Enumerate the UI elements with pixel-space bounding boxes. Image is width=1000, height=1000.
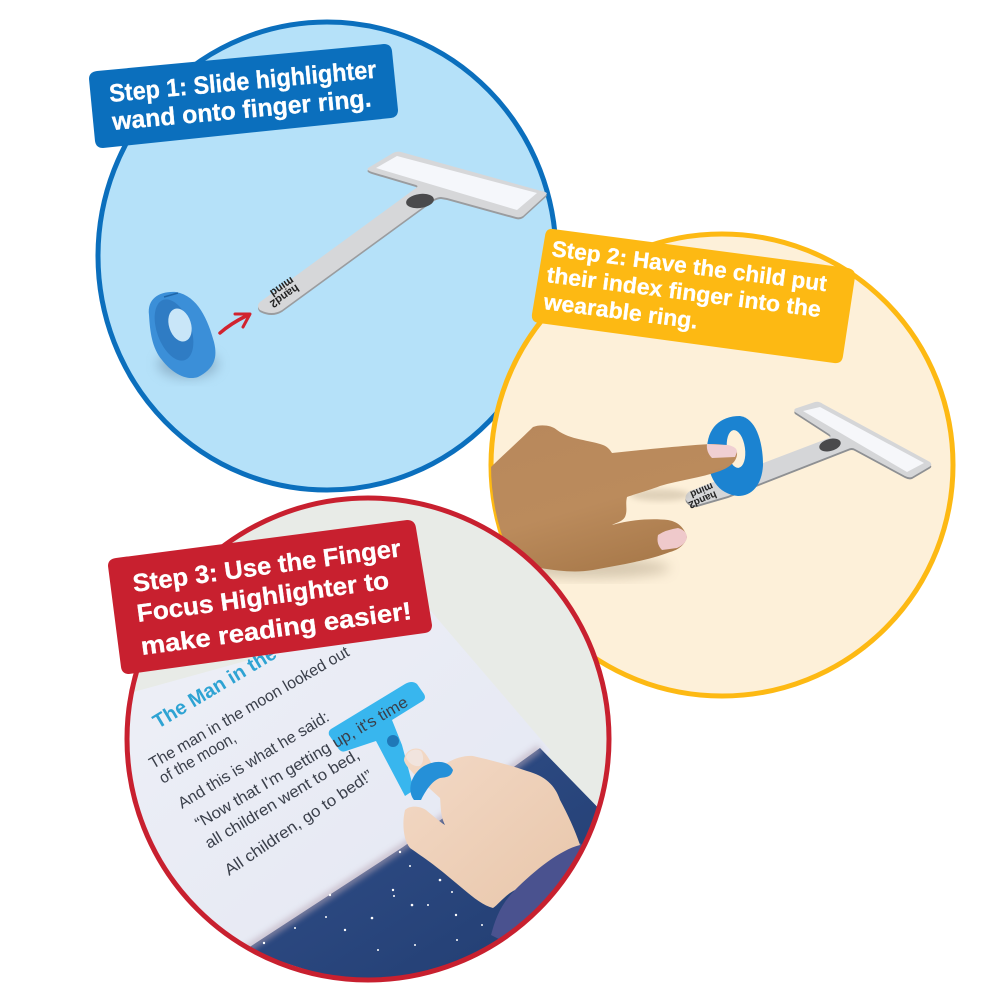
poem text: And this is what he said: [175, 709, 332, 812]
child's hand [403, 748, 580, 908]
blue highlighter wand [329, 682, 425, 796]
callout: step 3: Focus Highlighter to [135, 567, 391, 628]
finger ring [410, 762, 453, 800]
logo text: mind [688, 480, 715, 499]
poem text: “Now that I'm getting up, it's time [192, 694, 411, 832]
icon: wand and ring [683, 402, 931, 510]
poem text: The man in the moon looked out [146, 643, 353, 772]
callout: step 2: Step 2: Have the child put [550, 236, 829, 296]
callout: step 1: Step 1: Slide highlighter [108, 56, 378, 108]
icon: pointing hand [488, 425, 737, 578]
callout: step 2: wearable ring. [541, 289, 699, 334]
poem text: All children, go to bed!” [222, 767, 376, 879]
book cover: night sky [245, 744, 597, 978]
callout: step 3 [108, 520, 432, 674]
callout: step 2 [532, 229, 855, 363]
poem text: The Man in the [149, 642, 281, 733]
sleeve [491, 843, 582, 939]
panel: step 2 circle [488, 234, 953, 696]
photo: open book with hand [130, 610, 597, 978]
icon: blue finger ring [147, 292, 218, 378]
poem text: all children went to bed, [202, 747, 363, 852]
callout: step 1 [89, 44, 398, 148]
logo text [683, 480, 718, 510]
book page [130, 610, 550, 945]
logo text: hand2 [686, 488, 718, 510]
poem text [146, 642, 411, 879]
callout: step 2: their index finger into the [545, 262, 822, 322]
panel: step 1 circle [98, 22, 556, 490]
callout: step 3: make reading easier! [139, 597, 413, 661]
arrow: red [220, 314, 250, 333]
panel: step 3 circle [124, 496, 612, 982]
callout: step 3: Step 3: Use the Finger [131, 534, 403, 598]
logo text [262, 274, 301, 310]
icon: highlighter wand [258, 152, 547, 315]
poem text: of the moon, [156, 730, 239, 787]
logo text: mind [268, 274, 296, 299]
logo text: hand2 [267, 282, 301, 310]
callout: step 1: wand onto finger ring. [110, 85, 372, 136]
